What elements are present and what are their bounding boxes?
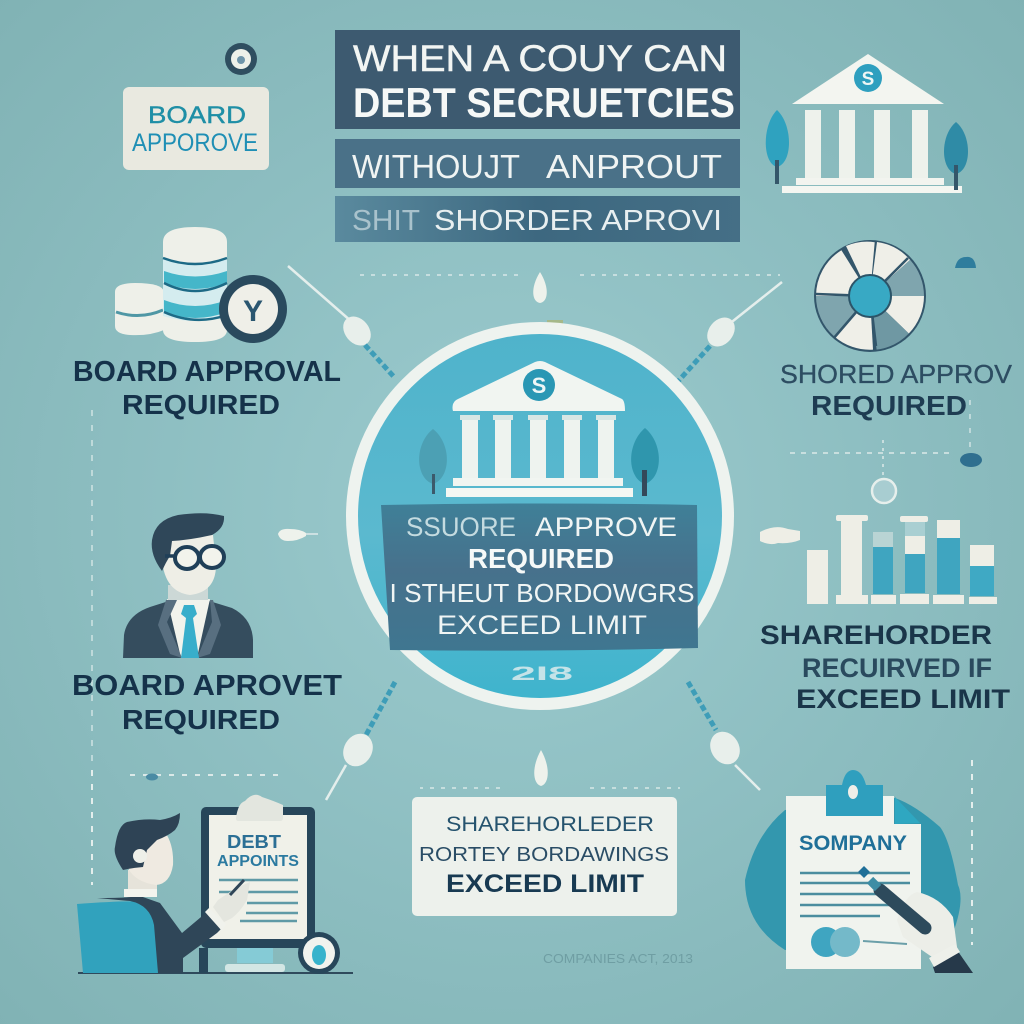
label: shareholder required if exceed limit: EXCEED LIMIT <box>796 684 1011 714</box>
card: shareholder borrowings exceed limit: EXCEED LIMIT <box>446 870 644 898</box>
icon: central bank: S <box>532 373 546 398</box>
label: board approval required (top): BOARD APPROVAL <box>73 356 341 388</box>
icon: man at monitor: DEBT <box>227 832 281 852</box>
text band: SSUORE <box>406 512 516 542</box>
icon: coin stacks: Y <box>243 295 263 328</box>
title line 3 <box>335 139 740 188</box>
card: board approve <box>123 87 269 170</box>
label: shareholder required if exceed limit: RECUIRVED IF <box>802 653 992 683</box>
card: shareholder borrowings exceed limit <box>412 797 677 916</box>
label: shareholder required if exceed limit: SHAREHORDER <box>760 620 992 650</box>
icon: signing document <box>745 770 973 973</box>
label: board aprovet required: BOARD APROVET <box>72 670 342 702</box>
text band: REQUIRED <box>468 543 614 574</box>
small mark: 2I8 <box>511 664 573 685</box>
central circle <box>346 322 734 710</box>
icon: central bank <box>419 361 659 497</box>
title line 1 and 2: WHEN A COUY CAN <box>353 38 727 79</box>
icon: bank top right <box>766 54 968 193</box>
icon: signing document: SOMPANY <box>799 832 907 855</box>
label: board approval required (top) <box>73 356 341 420</box>
icon: bank top right: S <box>862 69 874 90</box>
text band: EXCEED LIMIT <box>437 610 647 640</box>
title line 3: WITHOUJT <box>352 148 520 185</box>
text band <box>381 504 698 651</box>
title line 4 <box>335 196 740 242</box>
icon: man at monitor <box>77 795 353 974</box>
card: shareholder borrowings exceed limit: RORTEY BORDAWINGS <box>419 844 669 866</box>
card: board approve: BOARD <box>148 102 246 129</box>
title line 1 and 2 <box>335 30 740 129</box>
label: board aprovet required: REQUIRED <box>122 704 280 735</box>
text band: APPROVE <box>535 512 677 542</box>
icon: man with glasses <box>123 513 253 658</box>
icon: pie wheel <box>814 240 926 352</box>
label: board aprovet required <box>72 670 342 735</box>
text band: I STHEUT BORDOWGRS <box>390 578 694 608</box>
title line 1 and 2: DEBT SECRUETCIES <box>353 79 735 126</box>
label: shored approv required <box>780 359 1013 421</box>
label: shareholder required if exceed limit <box>760 620 1011 714</box>
title line 3: ANPROUT <box>546 148 722 185</box>
title banner <box>335 30 740 242</box>
card: board approve: APPOROVE <box>132 129 258 157</box>
faint footer text: COMPANIES ACT, 2013 <box>543 951 693 966</box>
label: shored approv required: SHORED APPROV <box>780 359 1013 389</box>
label: shored approv required: REQUIRED <box>811 390 967 421</box>
icon: bar chart <box>760 440 997 604</box>
icon: man at monitor: APPOINTS <box>217 853 299 870</box>
title line 4: SHORDER APROVI <box>434 205 722 237</box>
icon: small target top left <box>225 43 257 75</box>
small mark top right <box>955 257 976 268</box>
card: shareholder borrowings exceed limit: SHAREHORLEDER <box>446 813 654 836</box>
icon: coin stacks <box>115 227 287 343</box>
connector lines <box>92 266 972 945</box>
label: board approval required (top): REQUIRED <box>122 389 280 420</box>
title line 4: SHIT <box>352 205 420 237</box>
